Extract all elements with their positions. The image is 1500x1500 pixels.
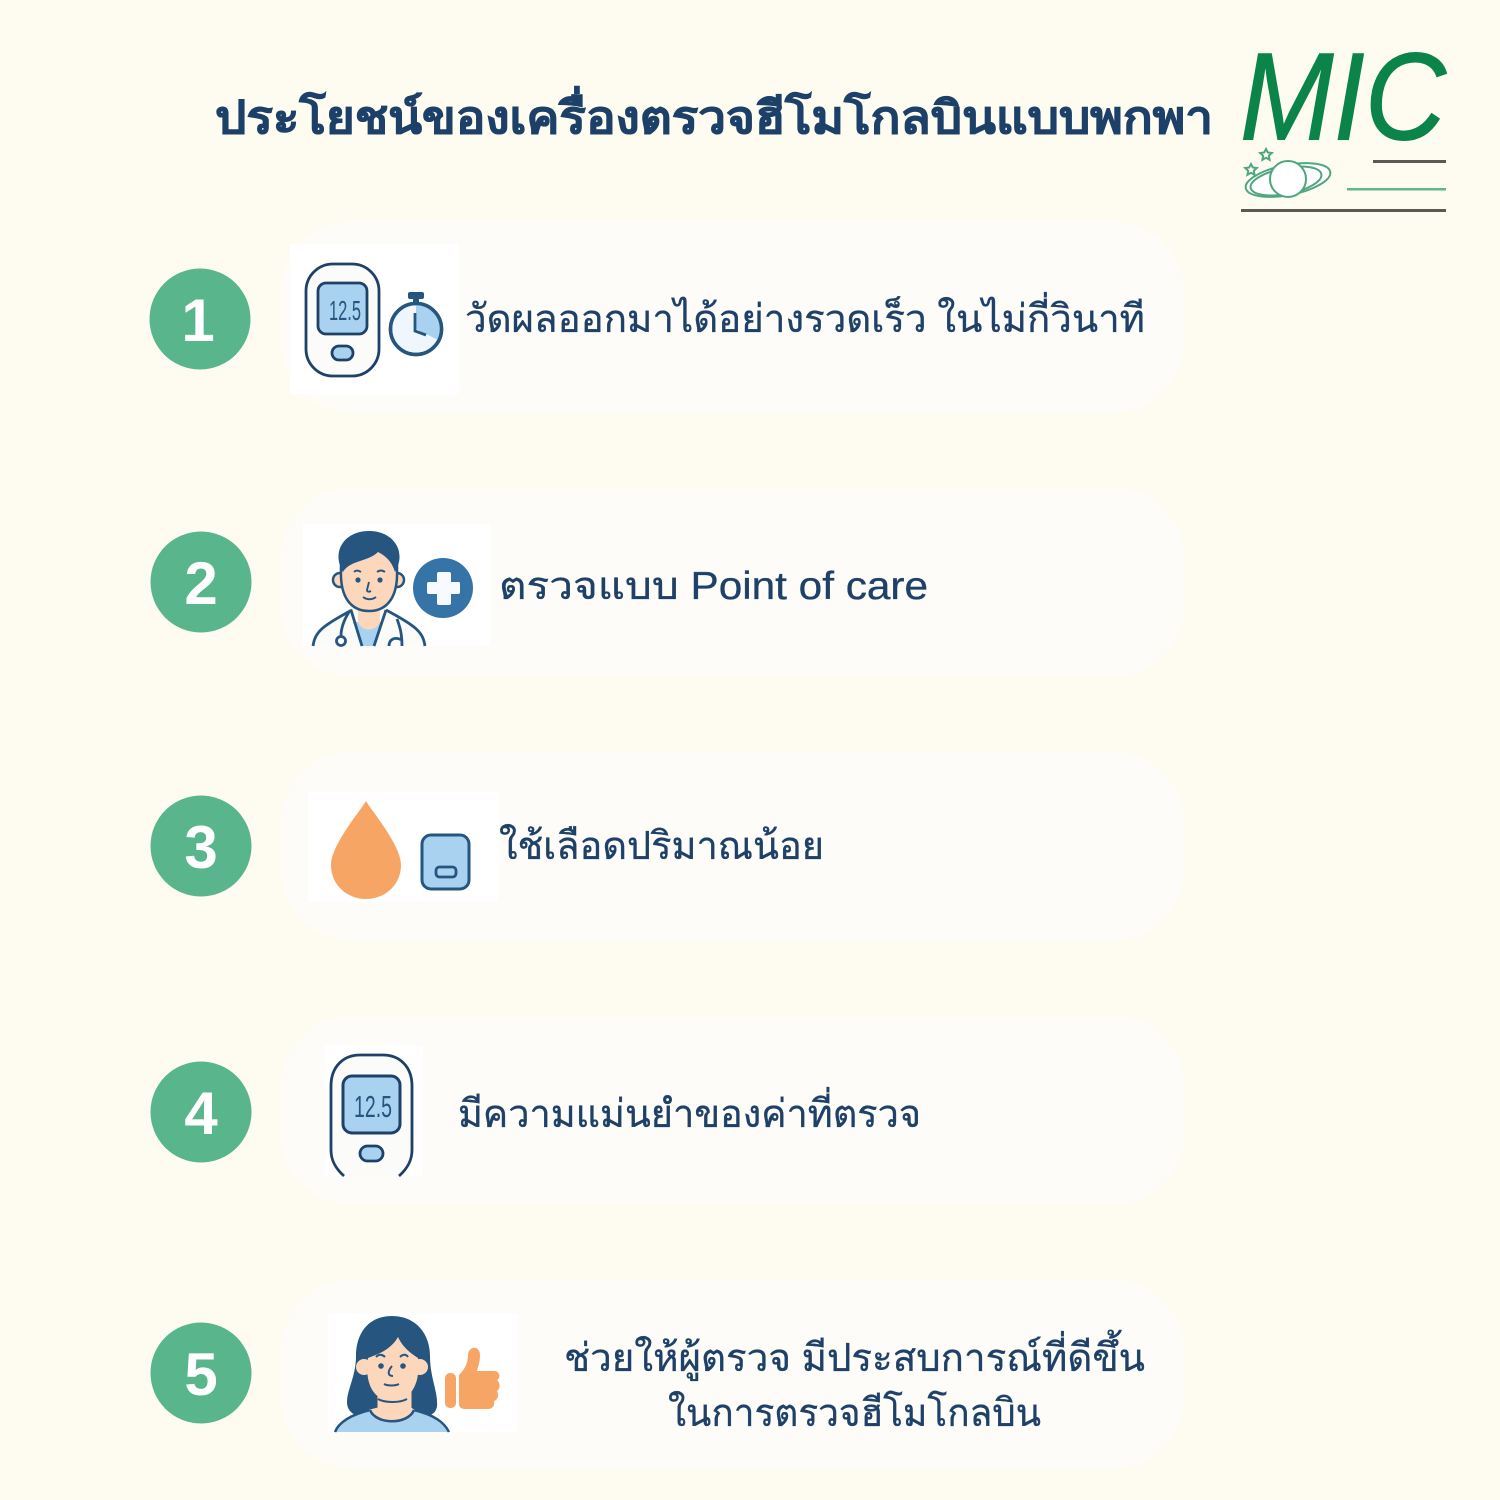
title: ประโยชน์ของเครื่องตรวจฮีโมโกลบินแบบพกพา <box>215 86 1213 143</box>
text: item 5 <box>564 1329 1145 1435</box>
number badge 5: 5 <box>184 1341 218 1408</box>
number badge 3 <box>150 796 252 896</box>
panel: item 3 <box>150 752 1184 940</box>
text: item 5: ในการตรวจฮีโมโกลบิน <box>668 1391 1041 1435</box>
text: item 5: ช่วยให้ผู้ตรวจ มีประสบการณ์ที่ดีขึ้น <box>564 1329 1145 1381</box>
panel: item 5 <box>150 1280 1184 1468</box>
logo: MIC: MIC <box>1240 28 1447 166</box>
icon: doctor with plus sign <box>303 524 490 646</box>
number badge 2: 2 <box>184 550 218 617</box>
text: item 4: มีความแม่นยำของค่าที่ตรวจ <box>458 1087 921 1136</box>
panel: item 1 <box>150 222 1184 412</box>
number badge 4 <box>150 1062 252 1162</box>
panel: item 2 <box>150 488 1184 676</box>
icon: glucose meter and stopwatch <box>290 244 458 394</box>
number badge 4: 4 <box>184 1080 218 1147</box>
icon: blood drop and test strip <box>308 792 498 902</box>
text: item 3: ใช้เลือดปริมาณน้อย <box>499 824 824 868</box>
number badge 5 <box>150 1322 252 1424</box>
number badge 1 <box>150 268 250 370</box>
number badge 2 <box>150 532 252 632</box>
icon: woman with thumbs up <box>328 1313 518 1432</box>
icon: glucose meter <box>325 1046 423 1176</box>
panel: item 4 <box>150 1016 1184 1204</box>
icon: glucose meter and stopwatch: 12.5 <box>329 295 361 326</box>
text: item 1: วัดผลออกมาได้อย่างรวดเร็ว ในไม่กี่วินาที <box>465 292 1145 341</box>
text: item 2: ตรวจแบบ Point of care <box>499 565 928 608</box>
number badge 1: 1 <box>181 287 215 354</box>
number badge 3: 3 <box>184 814 218 881</box>
icon: glucose meter: 12.5 <box>354 1089 392 1124</box>
